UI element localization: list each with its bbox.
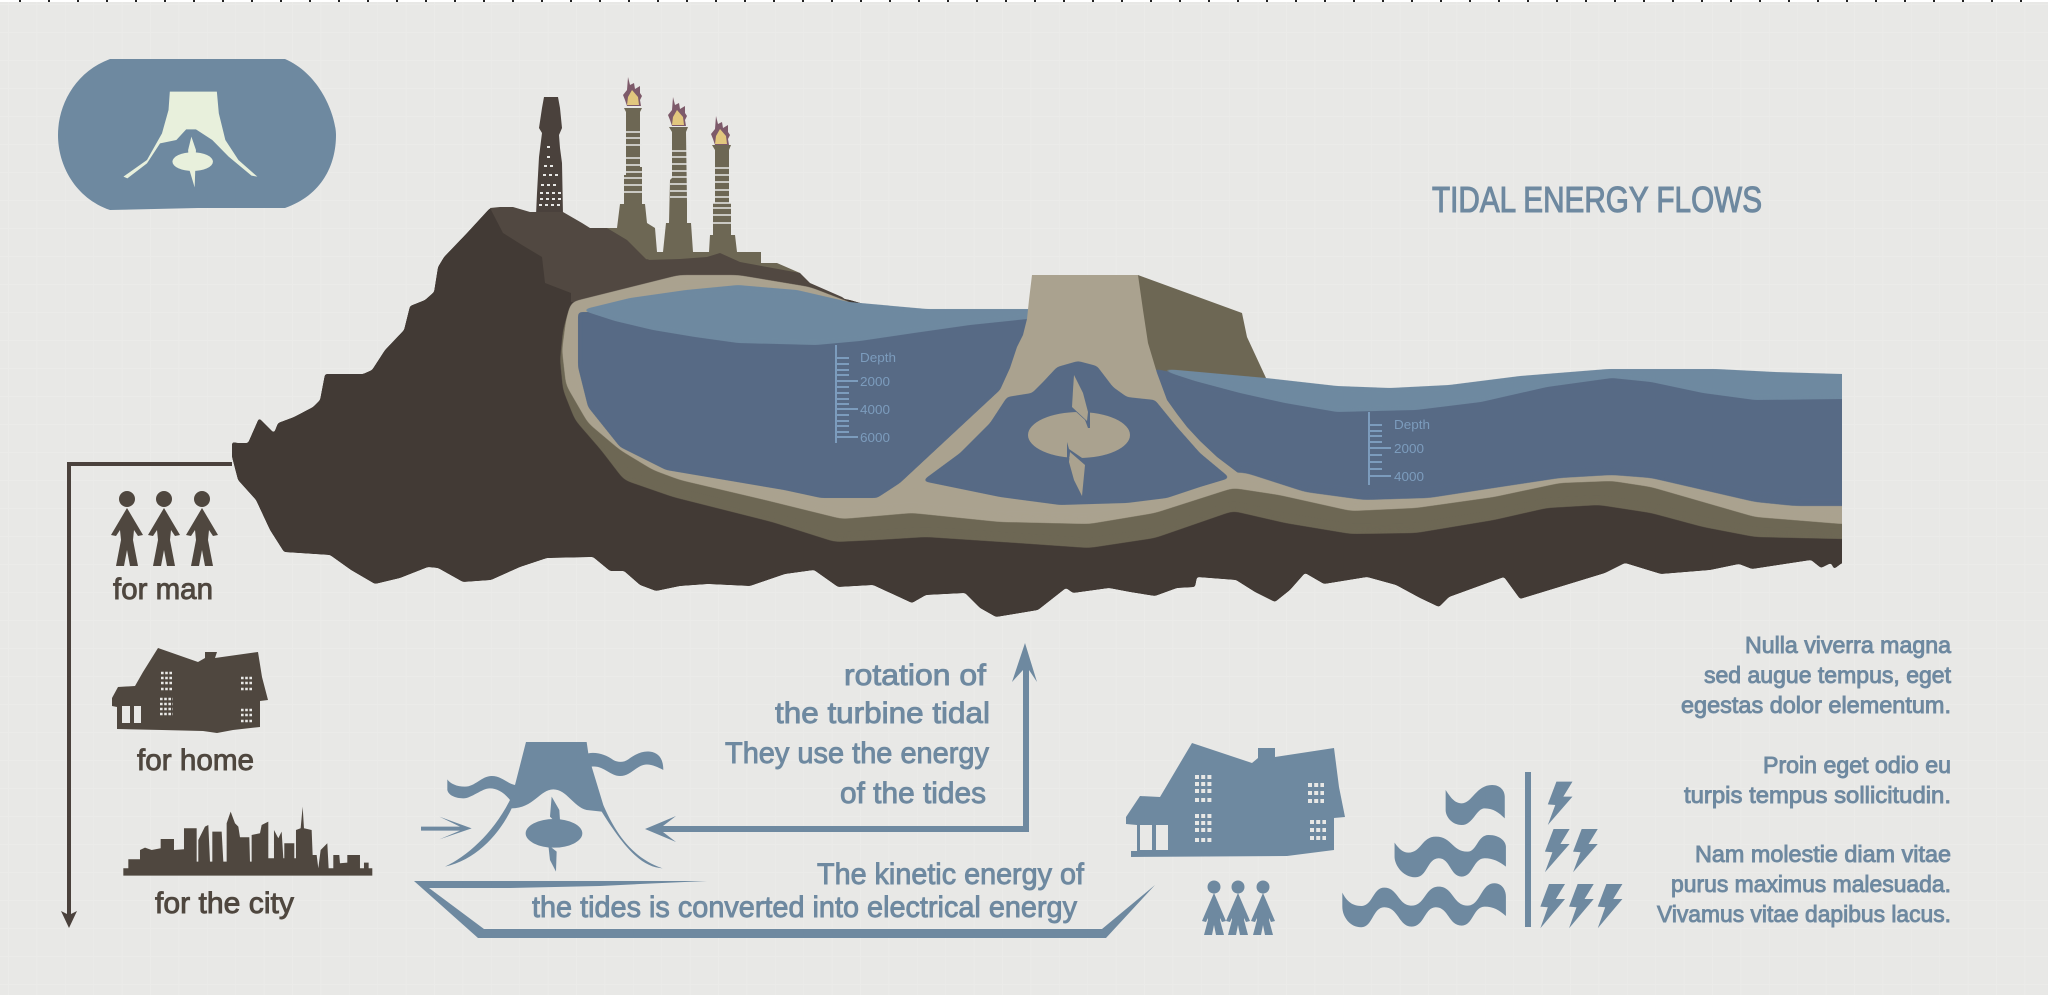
icon: city skyline [123,807,372,876]
seabed: olive layer [560,302,1880,548]
text block: right column [1657,632,1952,927]
icon: tidal turbine badge [58,59,336,210]
arrow: power distribution line [61,462,232,928]
title: TIDAL ENERGY FLOWS [1432,179,1762,220]
dam rear slope [1138,275,1266,378]
turbine chamber [922,361,1230,505]
text: rotation of the turbine: rotation of [844,659,987,692]
boat-shaped bracket [414,881,1155,938]
flame: chimney 2 [668,97,687,126]
depth labels: Depth [860,350,896,365]
flame: chimney 1 [623,77,642,106]
text: kinetic energy: the tides is converted into electrical energy [532,891,1077,924]
oil derrick [536,97,563,215]
text block: right column: Nam molestie diam vitae [1695,841,1951,867]
icon: lightning bolts [1540,782,1622,928]
turbine wheel [1028,375,1130,496]
text: rotation of the turbine: They use the energy [725,737,989,770]
label: for man: for man [113,573,213,606]
text: rotation of the turbine: the turbine tidal [775,697,990,730]
water: left reservoir surface [581,285,1050,345]
text: rotation of the turbine [725,659,990,810]
depth labels: 4000 [860,402,890,417]
label: for home: for home [137,744,254,777]
dark ground silhouette [232,208,1880,617]
icon: dam with waves [421,742,663,872]
text block: right column: Nulla viverra magna [1745,632,1951,658]
depth labels: 2000 [860,374,890,389]
depth labels [860,350,896,445]
factory chimneys [607,77,810,290]
water: left reservoir deep [578,305,1045,498]
turbine [526,797,582,872]
depth labels: Depth [1394,417,1430,432]
depth scale: reservoir [836,345,896,445]
icon: house [112,648,268,733]
label: for the city: for the city [155,887,294,920]
depth labels: 4000 [1394,469,1424,484]
text block: right column: egestas dolor elementum. [1681,692,1951,718]
icon: blue house [1126,743,1345,857]
icon: waves by strength [1342,785,1506,927]
depth labels [1394,417,1430,484]
depth labels: 6000 [860,430,890,445]
text block: right column: purus maximus malesuada. [1671,871,1951,897]
icon: blue people [1202,880,1275,935]
brown hill layer [490,207,847,302]
tidal dam [1000,275,1238,473]
water: right sea deep [1150,368,1880,506]
arrow: tide in [421,817,472,839]
arrow: rotation flow [645,643,1037,842]
depth scale: sea [1369,412,1430,485]
depth labels: 2000 [1394,441,1424,456]
flame: chimney 3 [711,116,730,145]
water: right sea surface [1155,368,1880,412]
text: kinetic energy: The kinetic energy of [817,858,1085,891]
text block: right column: Vivamus vitae dapibus lacus. [1657,901,1951,927]
text block: right column: sed augue tempus, eget [1704,662,1952,688]
icon: three people [111,491,218,566]
divider bar [1525,772,1531,927]
text block: right column: Proin eget odio eu [1763,752,1951,778]
text: rotation of the turbine: of the tides [840,777,986,810]
text: kinetic energy [532,858,1085,924]
cross-section [232,207,1880,617]
seabed: tan layer [562,275,1880,524]
text block: right column: turpis tempus sollicitudin. [1684,782,1951,808]
